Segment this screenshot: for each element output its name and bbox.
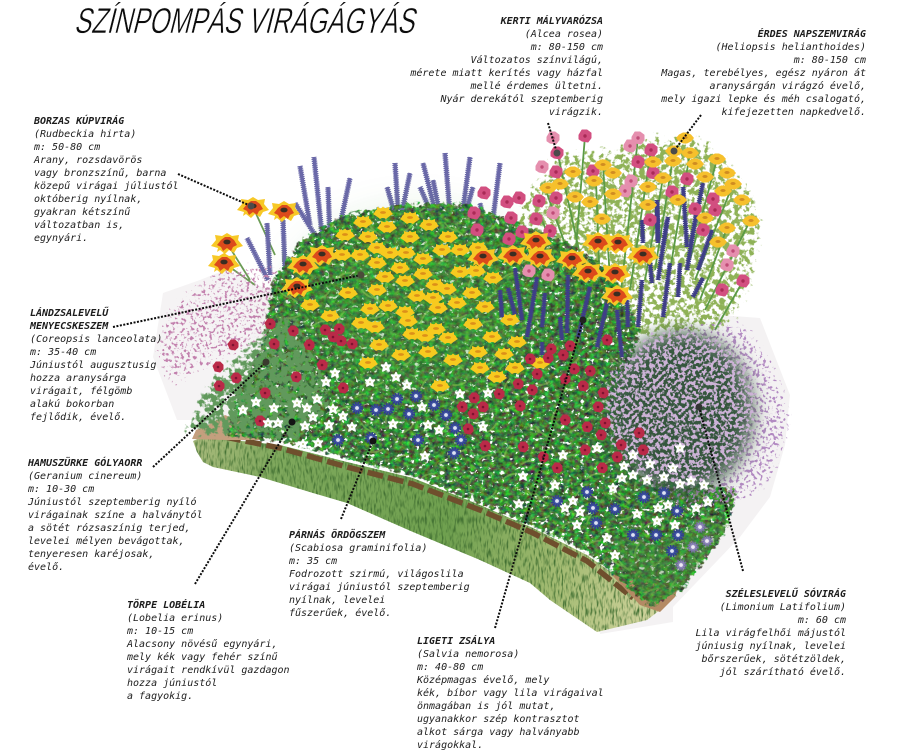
- leader: lándzsalevelű menyecskeszem: [113, 272, 364, 327]
- right limonium mound: [594, 312, 800, 518]
- main foliage mound: [178, 203, 738, 608]
- leader: borzas kúpvirág: [178, 174, 254, 210]
- text: széleslevelű sóvirág: SZÉLESLEVELŰ SÓVIRÁG (Limonium Latifolium) m: 60 cm Lila virágfelhői májustól júniusig nyílnak, levelei bőrszerűek, sötétzöldek, jól szárítható évelő.: [695, 589, 846, 678]
- rudbeckia flowers: [208, 197, 659, 306]
- soil edge: [192, 415, 677, 612]
- pale cut-out background: [153, 270, 790, 634]
- left limonium cloud: [146, 258, 295, 400]
- leader: párnás ördögszem: [341, 438, 376, 519]
- text: ligeti zsálya: LIGETI ZSÁLYA (Salvia nemorosa) m: 40-80 cm Középmagas évelő, mely kék, bíbor vagy lila virágaival önmagában is jól mutat, ugyanakkor szép kontrasztot alkot sárga vagy halványabb virágokkal.: [417, 636, 604, 751]
- blue scabiosa flowers: [333, 391, 712, 570]
- leader: ligeti zsálya: [495, 316, 586, 628]
- back purple salvia spikes: [247, 153, 500, 280]
- right lower leaves: [610, 520, 728, 606]
- left geranium foliage: [178, 300, 335, 445]
- text: párnás ördögszem: PÁRNÁS ÖRDÖGSZEM (Scabiosa graminifolia) m: 35 cm Fodrozott szirmú, világoslila virágai júniustól szeptemberig nyílnak, levelei fűszerűek, évelő.: [289, 530, 470, 619]
- text: lándzsalevelű menyecskeszem: LÁNDZSALEVELŰ MENYECSKESZEM (Coreopsis lanceolata) m: 35-40 cm Júniustól augusztusig hozza aranysárga virágait, félgömb alakú bokorban fejlődik, évelő.: [30, 308, 162, 423]
- upper right foliage and stems: [224, 130, 770, 350]
- front purple salvia spikes: [500, 183, 712, 357]
- leader lines: [113, 115, 743, 628]
- leader: érdes napszemvirág: [670, 115, 701, 154]
- leader: kerti mályvarózsa: [548, 123, 560, 156]
- leader: törpe lobélia: [195, 418, 296, 584]
- text: kerti mályvarózsa: KERTI MÁLYVARÓZSA (Alcea rosea) m: 80-150 cm Változatos színvilágú, mérete miatt kerítés vagy házfal mellé érdemes ültetni. Nyár derekától szeptemberig virágzik.: [410, 16, 603, 118]
- leader: hamuszürke gólyaorr: [153, 358, 270, 467]
- pink hollyhock flowers: [468, 130, 749, 296]
- title: SZÍNPOMPÁS VIRÁGÁGYÁS: [72, 1, 422, 41]
- golden heliopsis flowers: [539, 132, 760, 248]
- text: hamuszürke gólyaorr: HAMUSZÜRKE GÓLYAORR (Geranium cinereum) m: 10-30 cm Júniustól szeptemberig nyíló virágainak színe a halványtól a sötét rózsaszínig terjed, levelei mélyen bevágottak, tenyeresen karéjosak, évelő.: [28, 458, 203, 573]
- text: törpe lobélia: TÖRPE LOBÉLIA (Lobelia erinus) m: 10-15 cm Alacsony növésű egynyári, mely kék vagy fehér színű virágait rendkívül gazdagon hozza júniustól a fagyokig.: [127, 600, 290, 702]
- lawn: [193, 437, 660, 632]
- text: érdes napszemvirág: ÉRDES NAPSZEMVIRÁG (Heliopsis helianthoides) m: 80-150 cm Magas, terebélyes, egész nyáron át aranysárgán virágzó évelő, mely igazi lepke és méh csalogató, kifejezetten napkedvelő.: [661, 29, 866, 118]
- leader: széleslevelű sóvirág: [696, 404, 743, 571]
- yellow coreopsis flowers: [300, 206, 550, 392]
- text: borzas kúpvirág: BORZAS KÚPVIRÁG (Rudbeckia hirta) m: 50-80 cm Arany, rozsdavörös vagy bronzszínű, barna közepű virágai júliustól októberig nyílnak, gyakran kétszínű változatban is, egynyári.: [34, 116, 178, 244]
- white lobelia flowers: [238, 362, 712, 559]
- crimson geranium flowers: [213, 319, 648, 473]
